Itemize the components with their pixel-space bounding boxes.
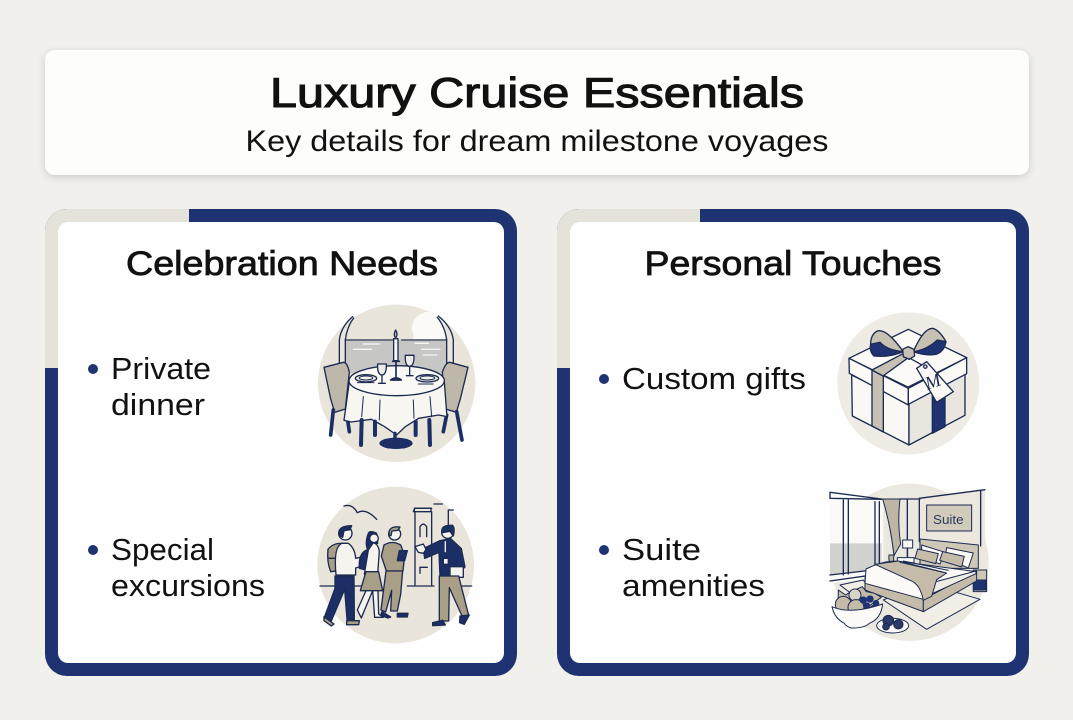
subtitle: Key details for dream milestone voyages xyxy=(246,125,828,158)
list item: custom gifts: Custom gifts xyxy=(622,361,806,396)
list item: private dinner xyxy=(88,351,211,422)
icon: gift box: M xyxy=(921,369,945,395)
backpack traveler xyxy=(324,526,371,626)
guide xyxy=(415,525,469,626)
list item: private dinner: dinner xyxy=(111,387,205,422)
list item: suite amenities xyxy=(599,532,765,603)
list item: suite amenities: Suite xyxy=(622,532,701,567)
list item: special excursions: excursions xyxy=(111,568,265,603)
list item: private dinner: Private xyxy=(111,351,211,386)
title card xyxy=(45,50,1029,175)
man with tablet xyxy=(381,527,408,618)
icon: suite room xyxy=(830,484,989,641)
heading: celebration needs: Celebration Needs xyxy=(126,245,438,283)
panel: celebration needs xyxy=(45,209,517,676)
panel: personal touches xyxy=(557,209,1029,676)
list item: special excursions: Special xyxy=(111,532,214,567)
icon: gift box xyxy=(837,312,979,454)
title: Luxury Cruise Essentials xyxy=(270,69,804,116)
list item: suite amenities: amenities xyxy=(622,568,765,603)
suite sign xyxy=(927,505,972,531)
woman traveler xyxy=(357,532,383,618)
suite sign: Suite xyxy=(933,513,964,527)
list item: special excursions xyxy=(88,532,265,603)
icon: excursion group xyxy=(317,487,474,643)
heading: personal touches: Personal Touches xyxy=(644,245,942,283)
fruit bowl xyxy=(832,587,909,633)
icon: private dinner table xyxy=(318,305,475,462)
